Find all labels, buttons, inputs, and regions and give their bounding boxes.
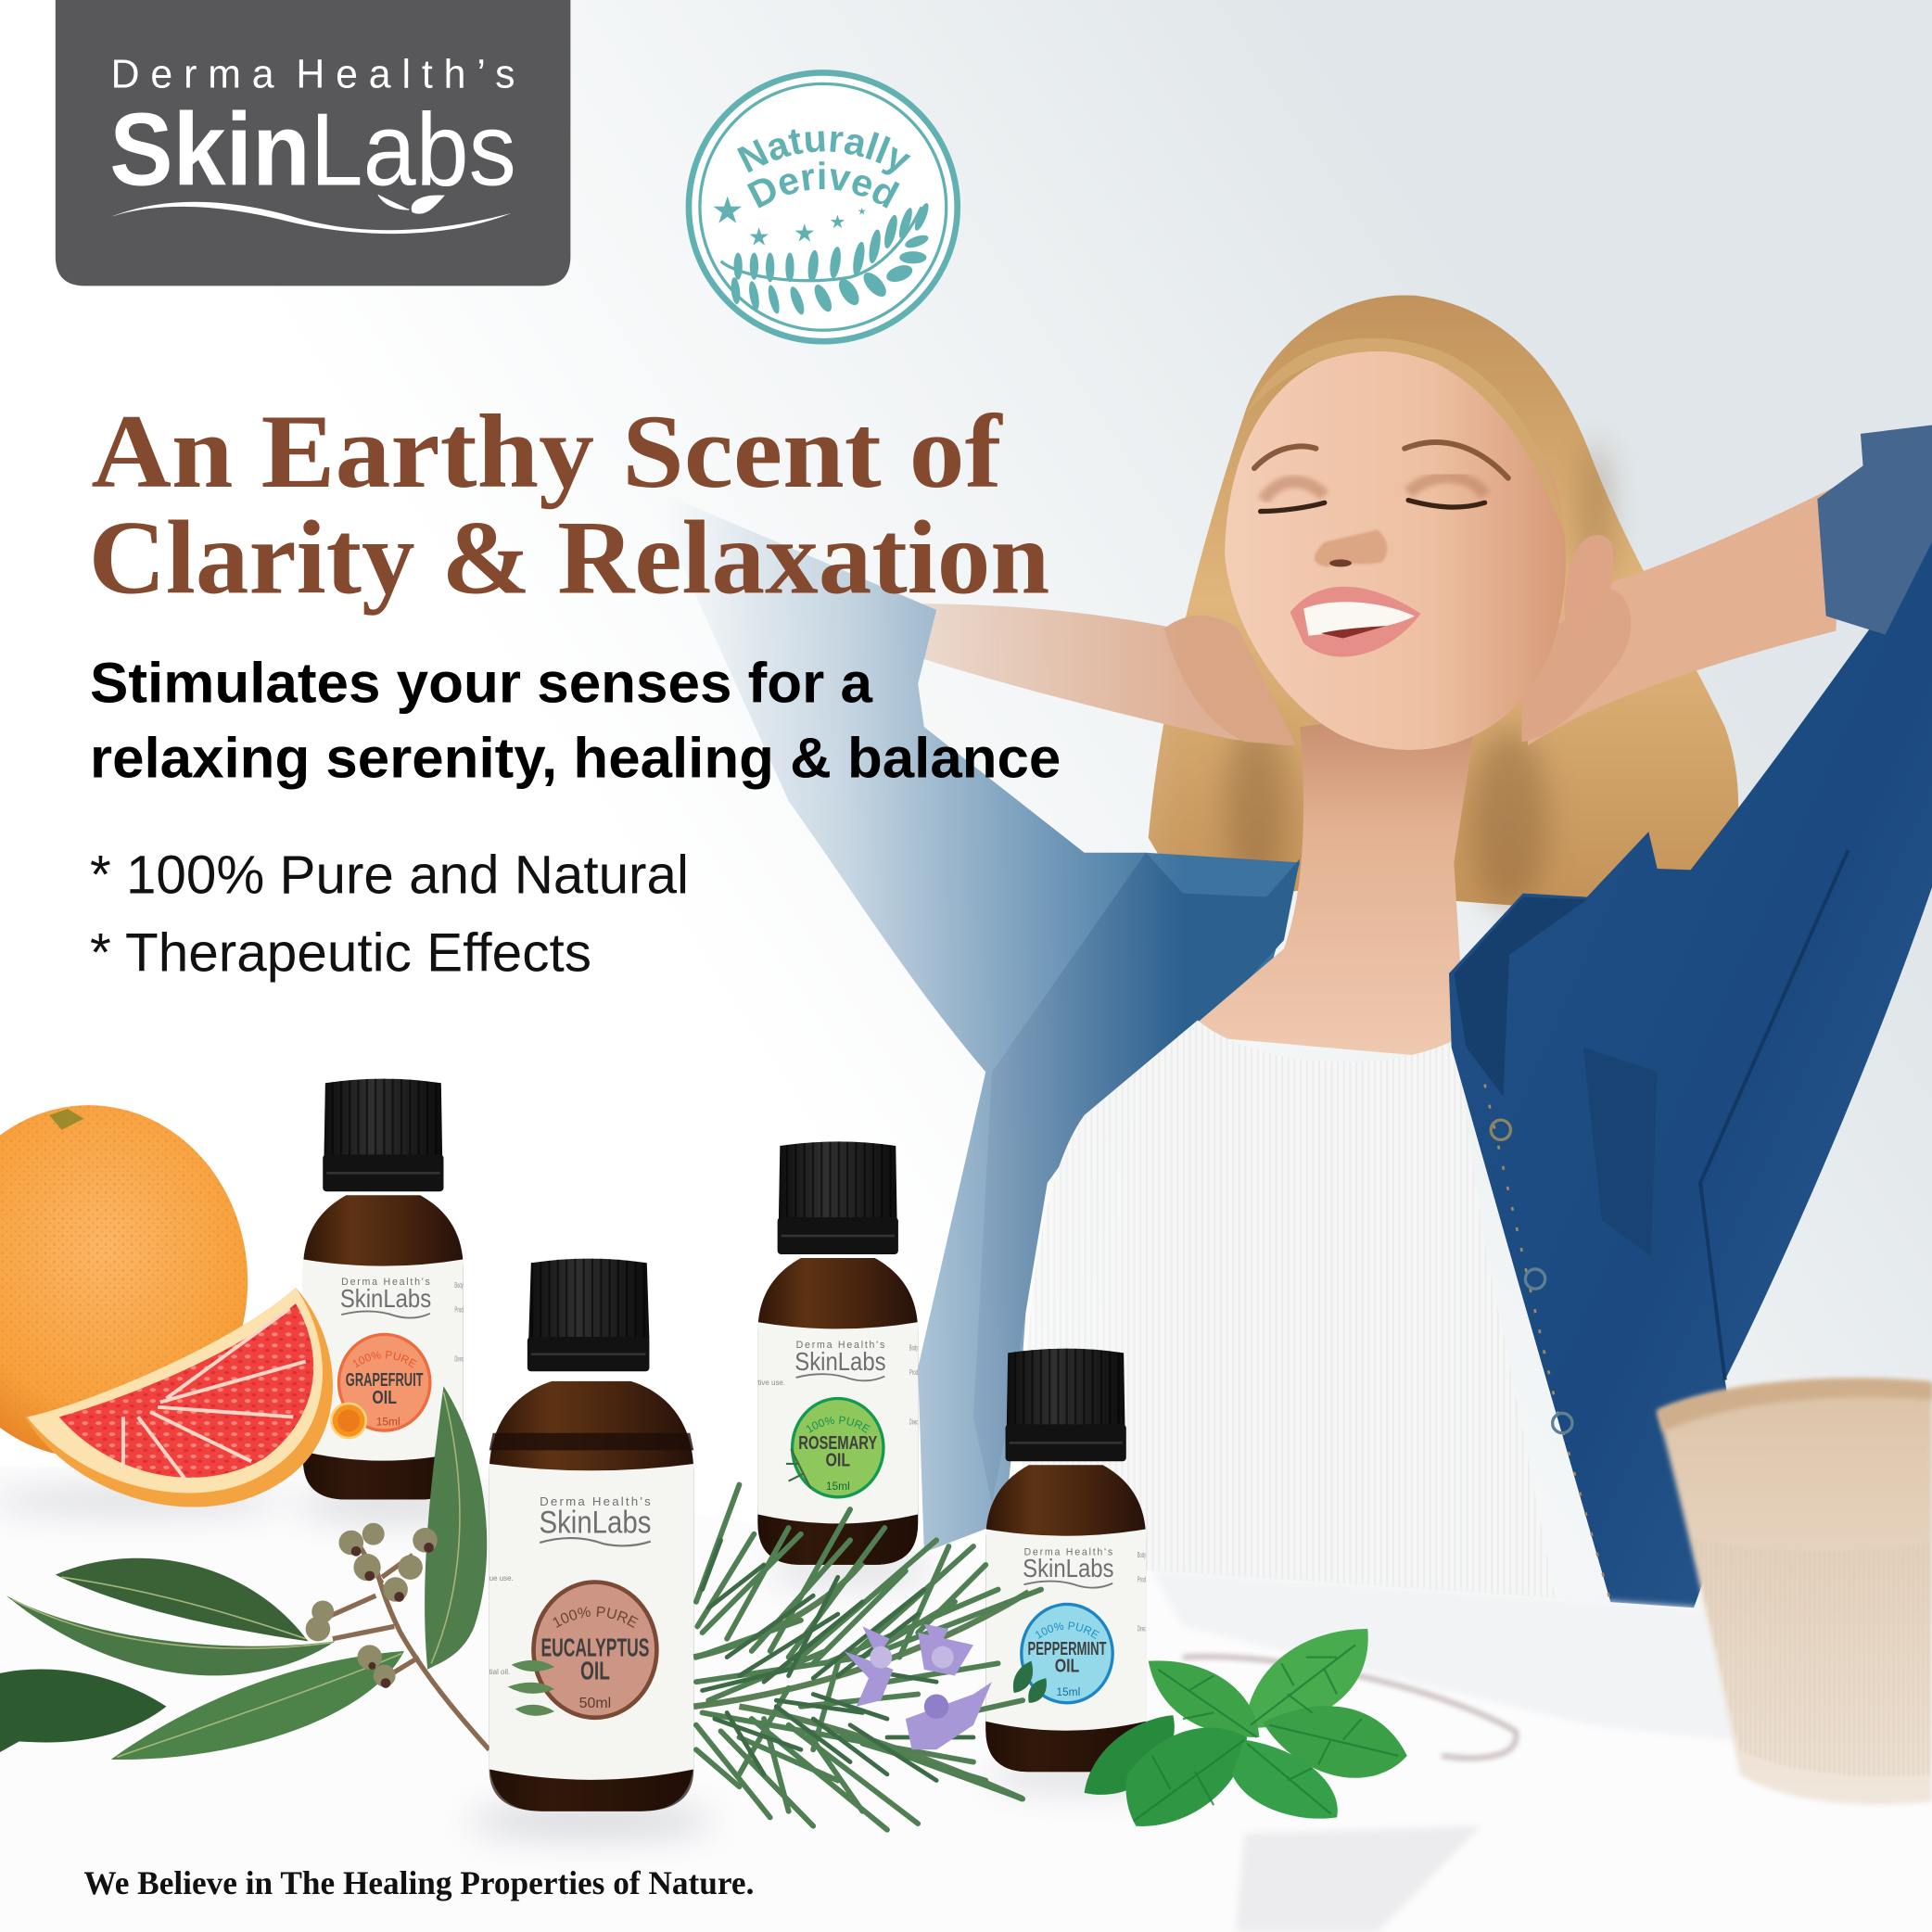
label: OIL [372, 1388, 397, 1408]
band [489, 1433, 693, 1450]
glass body [757, 1258, 918, 1565]
bottle: peppermint oil [985, 1348, 1146, 1773]
hair [1149, 295, 1738, 909]
label: Derma Health's [796, 1340, 884, 1351]
label: OIL [1055, 1657, 1079, 1677]
label: Derma Health's [341, 1277, 430, 1288]
label: tive use. [757, 1379, 785, 1387]
base shadow [489, 1763, 693, 1811]
base shadow [985, 1718, 1146, 1772]
badge stars: ★ [711, 190, 744, 233]
leaves [425, 1386, 487, 1670]
badge stars: ★ [748, 222, 770, 251]
label: SkinLabs [539, 1505, 651, 1540]
swoosh [111, 202, 512, 234]
left sleeve [647, 487, 1300, 1553]
label: Body [1138, 1551, 1146, 1559]
hair shadow [1225, 443, 1608, 909]
blurred glasses [1183, 1657, 1516, 1758]
label: 15ml [1056, 1685, 1080, 1698]
blurred tablet [1236, 1826, 1481, 1932]
brand small line: D e r m a H e a l t h ’ s [111, 51, 515, 96]
right jacket [1449, 542, 1932, 1624]
left hand [1164, 616, 1296, 745]
left forearm [918, 604, 1288, 745]
lips [1290, 587, 1420, 657]
base shadow [757, 1510, 918, 1565]
label: Prod [1138, 1576, 1146, 1584]
label: Body [454, 1281, 464, 1290]
label: PEPPERMINT [1027, 1639, 1107, 1659]
label: SkinLabs [1023, 1554, 1113, 1582]
headline [89, 394, 1049, 616]
label: 15ml [376, 1416, 400, 1429]
label: tial oil. [489, 1668, 510, 1676]
label: 100% PURE [807, 1417, 871, 1433]
photo: relaxing woman [647, 295, 1932, 1624]
badge: naturally derived [689, 72, 958, 341]
label: Direc [1138, 1625, 1146, 1633]
face [1225, 338, 1614, 750]
tagline: We Believe in The Healing Properties of Nature. [83, 1864, 754, 1901]
grapefruit whole [0, 1105, 248, 1457]
grapefruit wedge [25, 1288, 333, 1507]
neck and chest [1199, 724, 1473, 1055]
label: Body [909, 1344, 918, 1353]
right forearm [1528, 483, 1842, 745]
glass body [985, 1465, 1146, 1772]
lavender flowers [844, 1624, 992, 1749]
bottle: rosemary oil [757, 1141, 918, 1565]
label: GRAPEFRUIT [346, 1370, 424, 1391]
badge text: Naturally [737, 129, 910, 174]
headline: An Earthy Scent of [91, 394, 1003, 510]
cuff [1817, 426, 1932, 634]
rosemary sprig [693, 1485, 1041, 1830]
badge: naturally derived: Derived [747, 161, 899, 209]
nose [1315, 530, 1387, 566]
label: Derma Health's [1023, 1546, 1112, 1557]
closed eyes [1261, 501, 1485, 512]
needles [696, 1485, 1041, 1830]
label [489, 1464, 693, 1780]
subheading: relaxing serenity, healing & balance [90, 727, 1061, 790]
feature list [90, 845, 689, 983]
eyelid shade [1263, 477, 1485, 501]
subheading: Stimulates your senses for a [90, 652, 873, 715]
cap [1006, 1349, 1126, 1461]
left jacket panel [973, 853, 1300, 1503]
label: Prod [909, 1368, 918, 1377]
hair strand [1247, 338, 1568, 542]
glass body [303, 1195, 464, 1499]
label: EUCALYPTUS [540, 1633, 649, 1661]
branch [321, 1546, 489, 1749]
label: 100% PURE [1036, 1621, 1099, 1639]
table surface [0, 1467, 1932, 1932]
label: 100% PURE [352, 1351, 417, 1368]
product shadows [0, 1489, 1183, 1838]
label: Prod [454, 1305, 464, 1314]
brand name: SkinLabs [109, 91, 516, 207]
laurel [721, 201, 931, 316]
bottle: eucalyptus oil [489, 1259, 693, 1811]
label [303, 1259, 464, 1461]
eucalyptus sprig [0, 1386, 489, 1760]
label: Derma Health's [540, 1494, 651, 1508]
label: SkinLabs [794, 1347, 886, 1376]
bottle: grapefruit oil [302, 1079, 464, 1500]
label: OIL [580, 1657, 610, 1685]
stem [49, 1109, 83, 1130]
teeth [1303, 602, 1415, 636]
subheading [90, 652, 1061, 790]
bud tips [351, 1543, 434, 1688]
ear [1565, 535, 1613, 619]
badge stars: ★ [858, 205, 867, 217]
label [985, 1529, 1146, 1731]
stems [693, 1562, 1029, 1799]
label: OIL [825, 1451, 850, 1471]
dense needles [703, 1540, 973, 1781]
brows [1254, 442, 1508, 478]
badge stars: ★ [829, 211, 845, 233]
cap [323, 1079, 443, 1191]
mint leaves [1085, 1629, 1407, 1826]
leaf [378, 195, 443, 213]
label: Direc [454, 1355, 464, 1364]
label: ROSEMARY [798, 1433, 877, 1454]
tank top [1023, 1020, 1558, 1614]
glass body [489, 1381, 693, 1811]
coffee cup [1658, 1379, 1932, 1805]
cap [527, 1259, 649, 1371]
label: SkinLabs [340, 1284, 431, 1313]
label [757, 1322, 918, 1524]
label: 15ml [826, 1480, 850, 1493]
badge stars: ★ [794, 219, 816, 248]
label: ue use. [489, 1574, 514, 1582]
cap [778, 1141, 898, 1254]
feature list: * 100% Pure and Natural [90, 845, 689, 906]
leaf veins [12, 1392, 460, 1757]
table shade [1152, 1571, 1932, 1762]
seed buds [306, 1523, 438, 1687]
label: Direc [909, 1417, 918, 1426]
mint veins [1134, 1645, 1399, 1821]
label: 100% PURE [553, 1606, 639, 1628]
headline: Clarity & Relaxation [89, 500, 1049, 616]
feature list: * Therapeutic Effects [90, 922, 591, 983]
right hand [1521, 589, 1631, 742]
label: 50ml [579, 1696, 611, 1711]
base shadow [303, 1448, 464, 1499]
logo panel [56, 0, 570, 286]
